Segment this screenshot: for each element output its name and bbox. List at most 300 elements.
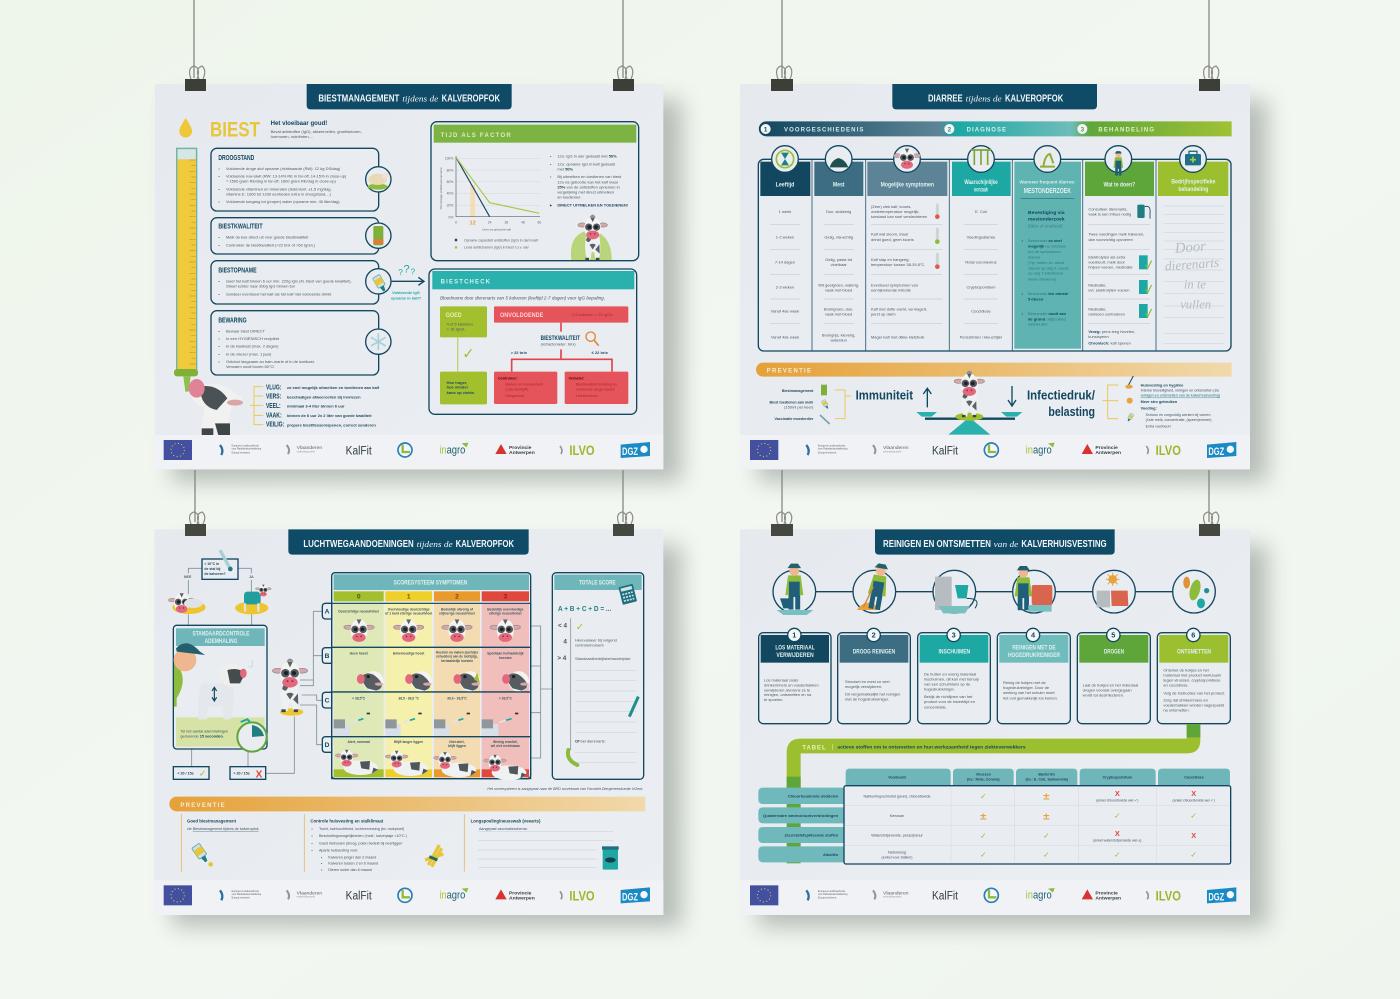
column: mogelijke symptomen: Mogelijke symptomen — [881, 181, 934, 188]
icon: calculator — [618, 584, 637, 605]
logo: round L — [984, 443, 998, 457]
box: verbeter — [565, 372, 628, 404]
column: mestonderzoek: mogelijk na ontstaan — [1028, 243, 1066, 248]
logo: ILVO — [1146, 442, 1181, 458]
panel: bewaring: • — [218, 344, 220, 349]
column: mest: vaak met bloed — [825, 287, 852, 292]
tab letters: D — [325, 742, 330, 749]
list: vijf V's: propere biestflessen/spenen, correct sonderen — [287, 422, 376, 427]
text: time facts: 12u na geboorte kan het kalf maar — [557, 179, 619, 184]
text: infectiedruk factors: Huisvesting en hygiëne — [1141, 384, 1183, 388]
card 4: hogedrukreiniger: hogedrukreiniger. Door de — [1003, 685, 1050, 690]
card 2: droog reinigen: mogelijk verwijderen. — [845, 684, 882, 689]
banner: preventie — [169, 797, 645, 811]
card 6: ontsmetten — [1157, 633, 1230, 724]
box: onvoldoende: 2-5 kalveren < 15 IgG/L — [572, 312, 614, 317]
table column headers: Cryptosporidium — [1103, 776, 1133, 780]
logo: ILVO — [1146, 887, 1181, 903]
column: mestonderzoek: Bevestiging via — [1028, 210, 1065, 216]
card 6: ontsmetten: en coccidiose. — [1163, 682, 1189, 687]
badge numbers: 1 — [792, 631, 796, 640]
column: mogelijke symptomen: drinkt goed, geen koorts — [871, 237, 914, 242]
row C: temperatuur: 38,5 - 38,9 °C — [398, 696, 420, 700]
logo: Provincie Antwerpen — [495, 889, 535, 901]
question: voldoende IgG opname: opname in kalf? — [391, 295, 422, 300]
text: time facts: met 50% — [557, 166, 574, 171]
column: mogelijke symptomen: Kalf wat sloom, maar — [871, 232, 909, 237]
effectiveness marks: (enkel chloordioxide wel ✓) — [1096, 798, 1138, 802]
text: bloedname: Bloedname door dierenarts van 5 kalveren (leeftijd 2-7 dagen) voor IgG bepaling. — [440, 295, 605, 300]
panel: droogstand: vitamine E: 1000 tot 1200 eenheden extra in droogstand,...) — [226, 191, 332, 196]
line chart: antibody uptake: 48 — [521, 220, 525, 224]
title banner — [875, 529, 1115, 555]
tab letters: C — [325, 698, 330, 705]
question box: temperature: < 10°C in — [204, 562, 219, 566]
card 6: ontsmetten: materiaal met product werkzaam — [1163, 672, 1222, 677]
box: goed: GOED — [446, 312, 462, 319]
logo: Europees Landbouwfonds — [806, 890, 848, 900]
logo: Europees Landbouwfonds: Europa investeert — [818, 897, 837, 900]
column: controle huisvesting: Controle huisvesting en stalklimaat — [310, 818, 384, 823]
question box: temperature: de stal bij — [204, 567, 220, 571]
logo: KalFit: KalFit — [346, 443, 372, 457]
column: waarschijnlijke oorzaak: oorzaak — [974, 187, 988, 194]
column: longspoeling — [464, 814, 619, 872]
column: mestonderzoek: mestonderzoek — [1028, 217, 1065, 223]
logo: Vlaanderen — [873, 890, 909, 899]
column: mestonderzoek: MESTONDERZOEK — [1024, 188, 1071, 195]
text: immuniteit factors: Biestmanagement — [782, 389, 814, 393]
logo: ILVO — [560, 887, 595, 903]
effectiveness marks: ± — [979, 811, 987, 822]
logo: Vlaanderen — [873, 445, 909, 454]
logo: inagro: inagro — [1026, 444, 1052, 456]
column: controle huisvesting: • — [321, 855, 323, 859]
box: controleer — [494, 372, 557, 404]
column: mestonderzoek: Wanneer frequent diarree: — [1019, 179, 1076, 184]
panel: bewaring: Ontdooi langzaam au bain-marie of in de koelkast. — [226, 359, 315, 364]
logo: Vlaanderen: Vlaanderen — [297, 890, 322, 896]
card 4: hogedrukreiniger: Reinig de hokjes met de — [1003, 680, 1047, 685]
line chart: antibody uptake: Percentage antilichaamopname — [439, 167, 443, 209]
arrow: down — [1008, 386, 1016, 406]
panel: droogstand: Voldoende ruw eiwit (RW: 13-14% RE in far-off, 14-15% in close-up) — [226, 173, 347, 178]
panel: droogstand: • — [218, 199, 220, 204]
line chart: antibody uptake: Opname capaciteit antistoffen (IgG) in darm kalf — [464, 238, 538, 242]
panel: bewaring: • — [218, 351, 220, 356]
column: wat te doen: Twee voedingen melk halveren, — [1088, 232, 1144, 237]
panel: tijd als factor — [431, 122, 639, 261]
arrow: up — [923, 388, 931, 407]
score columns: 1 — [407, 594, 411, 601]
panel: bewaring: In een HYGIËNISCH recipiënt — [226, 336, 280, 341]
row D: alertheid: Niet alert, — [449, 740, 465, 744]
subheading: vloeibaar goud — [271, 120, 362, 139]
logo: inagro: inagro — [1026, 890, 1052, 902]
logo: Provincie Antwerpen: Antwerpen — [509, 450, 535, 456]
column: mestonderzoek: • — [1022, 291, 1024, 296]
title banner: LUCHTWEGAANDOENINGEN — [303, 539, 414, 550]
text: immuniteit factors — [769, 385, 851, 424]
card 5: drogen: Laat de hokjes en het materiaal — [1083, 683, 1138, 688]
panel: biestopname: Sondeer eventueel het kalf als het kalf niet voldoende drinkt — [226, 291, 332, 296]
effectiveness marks: X — [1191, 789, 1196, 798]
row A: neusuitvloei: Doorzichtige neusuitvloei — [338, 609, 379, 613]
banner: preventie — [756, 363, 1232, 377]
row B: hoest: Spontaan herhaaldelijk — [487, 652, 524, 656]
column: waarschijnlijke oorzaak: Rota/ coronavirus — [965, 259, 997, 264]
column: waarschijnlijke oorzaak: Voedingsdiarree — [967, 234, 996, 239]
result: high breathing: > 20 / 15s — [233, 772, 250, 776]
column: mestonderzoek: (Tip: indien bv. uitval — [1028, 260, 1064, 265]
text: infectiedruk factors: Extra voerbeurt — [1146, 425, 1171, 429]
logo: Europees Landbouwfonds: Europa investeert — [232, 451, 250, 454]
effectiveness marks: X — [1115, 829, 1120, 838]
logo: EU flag — [164, 885, 192, 905]
card 6: ontsmetten: Ontsmet de hokjes en het — [1163, 667, 1210, 672]
logo: Vlaanderen — [287, 890, 322, 899]
box: goed — [440, 306, 487, 337]
text: infectiedruk factors: (1ste melk, concentratie, (speen)emmer) — [1146, 418, 1212, 422]
column: controle huisvesting: Tocht, luchtvochtheid, luchtverversing (bv. rookproef) — [319, 827, 404, 831]
text: time facts: vergelijking met direct uitmelken — [557, 189, 614, 194]
list: vijf V's: VEEL: — [266, 403, 281, 410]
panel: droogstand: • — [218, 173, 220, 178]
effectiveness marks: X — [1191, 831, 1196, 840]
card 4: hogedrukreiniger — [997, 633, 1070, 724]
text: time facts: DIRECT UITMELKEN EN TOEDIENEN! — [557, 202, 628, 207]
line chart: antibody uptake: 24 — [488, 220, 492, 224]
text: infectiedruk factors — [1102, 376, 1220, 429]
box: controleer: Controleer: — [498, 376, 518, 380]
text: immuniteit factors: (150ml per keer) — [784, 405, 814, 410]
panel: droogstand: Voldoende droge stof opname (richtwaarde (RW): 12 kg DS/dag) — [226, 166, 341, 171]
table body: Kenosan — [890, 814, 904, 818]
text: infectiedruk factors: reinigen en ontsmetten van de kalverhuisvesting) — [1141, 394, 1220, 398]
illustration: breathing calf — [198, 660, 253, 719]
logo: Vlaanderen — [287, 445, 322, 454]
box: goed: 4 of 5 kalveren — [447, 322, 473, 327]
box: verbeter: Verbeter: — [569, 376, 585, 380]
tab letters: A — [325, 609, 330, 616]
table body: Natriumhypochloriet (javel), chloordioxide — [863, 794, 931, 798]
row labels: Quaternaire ammoniumverbindingen — [763, 813, 839, 818]
card 1: los materiaal: te spoelen. — [764, 697, 783, 702]
column: mogelijke symptomen: (Zeer) ziek kalf, koorts, — [871, 204, 912, 209]
logo: Europees Landbouwfonds: Europa investeert — [232, 897, 250, 900]
logo: Europees Landbouwfonds: Europees Landbouwfonds — [232, 890, 260, 893]
line chart: antibody uptake: 12 — [470, 221, 476, 227]
column: wat te doen: Wat te doen? — [1103, 181, 1135, 188]
text: time facts — [549, 154, 628, 207]
score columns: 2 — [455, 594, 459, 601]
card 1: los materiaal: Los materiaal zoals — [764, 678, 798, 683]
card 3: inschuimen: inschuimen, dit kan met behulp — [924, 676, 980, 681]
row labels — [758, 787, 844, 863]
result: high breathing: X — [256, 769, 263, 780]
panel: totale score — [552, 573, 644, 779]
card 4: hogedrukreiniger: REINIGEN MET DE — [1012, 644, 1056, 651]
logo: Vlaanderen: Vlaanderen — [883, 890, 909, 896]
effectiveness marks: ✓ — [1190, 812, 1197, 821]
logo: round L — [984, 888, 998, 902]
table body: (enkel voor stallen) — [882, 856, 912, 860]
column: mogelijke symptomen: ondertemperatuur mogelijk; — [871, 209, 920, 214]
box: hoe hoger: Hoe hoger, — [447, 380, 467, 385]
column: mest: Dun, slokkerig — [826, 209, 851, 214]
step 4 illustration — [1013, 566, 1055, 613]
card 2: droog reinigen: met de hogedrukreiniger. — [845, 697, 889, 702]
effectiveness marks: ✓ — [1190, 851, 1197, 860]
column: leeftijd: Leeftijd — [776, 181, 794, 188]
logo: DGZ: DGZ — [622, 446, 638, 458]
row D: alertheid: Alert, normaal — [347, 740, 370, 744]
panel: bewaring: • — [218, 359, 220, 364]
poster 3: luchtwegaandoeningen — [154, 529, 663, 915]
footer: partner logos — [740, 880, 1250, 915]
panel: biestkwaliteit — [211, 218, 379, 254]
logo: Vlaanderen: verbeelding werkt — [883, 450, 902, 453]
column: controle huisvesting: Kalveren tussen 2 en 6 maand — [328, 862, 378, 866]
text: time facts: • — [550, 174, 552, 179]
logo: ILVO: ILVO — [569, 887, 595, 903]
box: verbeter: voldoende droge koeien — [576, 388, 615, 392]
column: waarschijnlijke oorzaak: Coccidiose — [971, 309, 992, 314]
step bar: voorgeschiedenis diagnose behandeling: VOORGESCHIEDENIS — [784, 128, 863, 134]
line chart: antibody uptake — [439, 156, 541, 250]
row A: neusuitvloei — [332, 603, 531, 647]
row A: neusuitvloei: Overvloedige doorzichtige — [388, 607, 430, 611]
panel: bewaring: Verwarm nooit boven 60°C! — [226, 364, 275, 369]
panel: droogstand: • — [218, 166, 220, 171]
heading: immuniteit: Immuniteit — [856, 388, 914, 402]
column: wat te doen: Chronisch: kalf spenen — [1088, 340, 1131, 345]
panel: standaardcontrole ademhaling: gedurende 15 seconden. — [180, 735, 224, 739]
logo: inagro: inagro — [439, 890, 465, 902]
label: NEE: NEE — [184, 575, 192, 579]
column: mogelijke symptomen: eenrijkomende infectie — [871, 287, 912, 292]
step bar: voorgeschiedenis diagnose behandeling: 3 — [1081, 126, 1085, 133]
row D: alertheid: wil niet rechtstaan — [490, 744, 520, 748]
card 2: droog reinigen: DROOG REINIGEN — [853, 649, 895, 656]
card 5: drogen — [1077, 633, 1150, 724]
title banner: REINIGEN EN ONTSMETTEN — [883, 539, 991, 550]
step bar: voorgeschiedenis diagnose behandeling: 1 — [764, 126, 768, 133]
panel: biestkwaliteit: BIESTKWALITEIT — [218, 224, 263, 231]
column: wat te doen: dan voorzichtig opvoeren — [1088, 237, 1133, 242]
column: mestonderzoek: • — [1022, 238, 1024, 243]
heading: infectiedruk belasting — [1027, 388, 1095, 419]
line chart: antibody uptake: Uren na geboorte kalf — [482, 227, 511, 231]
panel: totale score: Of bel dierenarts: — [575, 738, 606, 743]
step 6 illustration — [1173, 570, 1215, 613]
card 4: hogedrukreiniger: HOGEDRUKREINIGER — [1008, 652, 1060, 659]
illustration: calf drinking — [189, 379, 243, 435]
box: verbeter: Biestkwaliteit bolading en — [576, 383, 617, 387]
column: waarschijnlijke oorzaak: E. Coli — [975, 209, 987, 214]
panel: biestopname: • — [218, 279, 220, 284]
column: mestonderzoek: vanhet dier — [1028, 322, 1048, 327]
logo: Vlaanderen: verbeelding werkt — [883, 896, 902, 899]
card 4: hogedrukreiniger: het vuil gemakkelijk los komen. — [1003, 695, 1058, 700]
header: tijd als factor — [434, 125, 636, 143]
logo: Provincie Antwerpen — [1082, 444, 1121, 456]
panel: biestkwaliteit: • — [218, 235, 220, 240]
card 6: ontsmetten: voederbakken worden nagespoeld — [1163, 703, 1224, 708]
card 3: inschuimen: Bekijk de richtlijnen van het — [924, 694, 973, 699]
column: mest: Mest — [833, 181, 845, 188]
card 6: ontsmetten: Volg de instructies van het product. — [1163, 690, 1225, 695]
step 2 illustration — [853, 562, 896, 613]
column: wat te doen: Consulteer dierenarts, — [1088, 207, 1128, 212]
row D: alertheid: Blijft langer liggen — [394, 740, 423, 744]
text: time facts: Bij uitmelken en toedienen van biest — [557, 174, 622, 179]
logo: Europees Landbouwfonds: Europees Landbouwfonds — [232, 445, 260, 448]
title banner: KALVERHUISVESTING — [1021, 539, 1107, 550]
panel: droogstand: Voldoende toegang tot (proper) water (opname min. 40 liter/dag) — [226, 199, 340, 204]
title banner — [892, 84, 1097, 109]
icon: timer — [237, 719, 267, 752]
logo: DGZ: DGZ — [1208, 891, 1224, 903]
card 5: drogen: wordt tot desinfecteren. — [1083, 693, 1124, 698]
column: leeftijd — [760, 162, 810, 339]
panel: biestopname — [211, 261, 379, 304]
column: leeftijd: Vanaf 4de week — [771, 309, 799, 314]
badge numbers: 5 — [1111, 631, 1115, 640]
column: bedrijfsspecifieke behandeling: Door — [1173, 239, 1207, 257]
icon: manure pile — [830, 158, 848, 167]
logo: Vlaanderen: Vlaanderen — [883, 445, 909, 451]
list: vijf V's: binnen de 6 uur 2x 2 liter van goede kwaliteit — [287, 413, 372, 418]
line chart: antibody uptake: 36 — [504, 220, 508, 224]
table column headers: Voorbeeld — [888, 776, 906, 780]
step 3 illustration — [933, 570, 977, 613]
title banner: tijdens de — [966, 94, 1002, 104]
column: bedrijfsspecifieke behandeling: dierenarts — [1164, 255, 1220, 274]
column: bedrijfsspecifieke behandeling: in te — [1184, 277, 1206, 291]
result: high breathing — [230, 767, 266, 780]
header: biestcheck — [432, 271, 634, 289]
card 1: los materiaal: VERWIJDEREN — [776, 652, 814, 659]
footer: partner logos — [154, 880, 663, 915]
box: hoe hoger — [440, 372, 487, 404]
panel: biestopname: • — [218, 291, 220, 296]
subheading: vloeibaar goud: Bevat antistoffen (IgG), afweercellen, groeifactoren, — [271, 129, 362, 134]
effectiveness marks: X — [1115, 789, 1120, 798]
badge numbers: 6 — [1191, 631, 1195, 640]
effectiveness marks: ✓ — [980, 851, 987, 860]
logo: Vlaanderen: verbeelding werkt — [297, 896, 315, 899]
row C: temperatuur — [332, 692, 531, 737]
card 1: los materiaal: verwijderen alvorens ze te — [764, 687, 811, 692]
row labels: Alkaliën — [823, 852, 839, 857]
card 6: ontsmetten: tegen virussen, cryptosporidiose — [1163, 677, 1221, 682]
logo: round L — [398, 443, 412, 457]
panel: totale score: Herevalueer bij volgend — [575, 637, 617, 642]
column: mest — [814, 162, 863, 342]
column: mogelijke symptomen: Kalf met dofle vacht, vermagert, — [871, 306, 927, 311]
column: wat te doen: rantsoen controleren — [1088, 311, 1125, 316]
card 2: droog reinigen: Dit vergemakkelijkt het reinigen — [845, 692, 900, 697]
logo: DGZ: DGZ — [1208, 446, 1224, 458]
column: mest: vloeibaar — [831, 262, 847, 267]
column: mestonderzoek: 5 dieren — [1028, 296, 1044, 301]
column: leeftijd: Vanaf 4de week — [771, 334, 799, 339]
logo: Europees Landbouwfonds: voor Plattelandsontwikkeling — [232, 893, 262, 896]
row A: neusuitvloei: Bedeidijk uitvorig of — [441, 607, 474, 611]
logo: Europees Landbouwfonds — [220, 890, 262, 900]
row B: hoest: hoesten — [499, 656, 512, 660]
logo: Provincie Antwerpen — [1082, 889, 1121, 901]
icon: medical case — [1185, 151, 1201, 165]
column: mest: waterdun — [830, 337, 847, 342]
column: leeftijd: 1 week — [779, 209, 791, 214]
connector and check: ✓ — [462, 345, 474, 362]
panel: biestopname: Streef echter naar 300g IgG binnen 6u! — [226, 283, 295, 288]
row B: hoest — [332, 647, 531, 692]
row B: hoest: schudden) aan de luchtpijp, — [436, 655, 478, 659]
panel: totale score: 4 — [563, 639, 567, 646]
title banner — [307, 84, 512, 109]
column: mogelijke symptomen: Mager kalf met dikke kletsbuik — [871, 334, 924, 339]
header: scoresysteem: SCORESYSTEEM SYMPTOMEN — [393, 580, 467, 587]
panel: standaardcontrole ademhaling: Tel het aantal ademhalingen — [180, 730, 228, 734]
badge numbers: 4 — [1031, 631, 1036, 640]
tab letters: B — [325, 653, 330, 660]
column: mogelijke symptomen — [867, 162, 947, 339]
title banner — [288, 529, 529, 555]
column: mestonderzoek: Bemonster zo snel — [1028, 238, 1062, 243]
effectiveness marks: (enkel chloordioxide wel ✓) — [1173, 798, 1215, 802]
logo: ILVO: ILVO — [569, 442, 595, 458]
column: controle huisvesting: Dieren ouder dan 6 maand — [328, 868, 372, 872]
table: voorgeschiedenis tot behandeling — [758, 146, 1231, 351]
logo: Europees Landbouwfonds: voor Plattelandsontwikkeling — [232, 448, 262, 451]
column: controle huisvesting: • — [311, 848, 313, 852]
row B: hoest: herhaaldelijk hoesten — [441, 659, 473, 663]
illustration: calf center — [273, 658, 307, 716]
logo: Provincie Antwerpen: Antwerpen — [1095, 895, 1121, 901]
step bar: voorgeschiedenis diagnose behandeling: DIAGNOSE — [967, 128, 1006, 134]
cards row — [759, 628, 1230, 724]
logo: ILVO — [560, 442, 595, 458]
icon: hourglass — [776, 150, 794, 168]
banner: preventie: PREVENTIE — [180, 803, 225, 809]
card 1: los materiaal: drinkemmers en voederbakken — [764, 683, 819, 688]
column: mest: Wit geelgroen, waterig, — [818, 282, 859, 287]
column: wat te doen: Medicatie, — [1088, 306, 1107, 311]
panel: totale score: > 4 — [557, 655, 567, 662]
card 1: los materiaal: reinigen, ontsmetten en na — [764, 692, 812, 697]
column: mogelijke symptomen: Eventueel symptomen van — [871, 282, 918, 287]
logo: EU flag — [164, 440, 192, 460]
panel: bewaring: • — [218, 336, 220, 341]
column: longspoeling: Longspoeling/neusswab (veearts) — [471, 818, 541, 823]
column: mestonderzoek: diarree — [1028, 254, 1041, 259]
tab letters — [325, 609, 330, 749]
decision: biestkwaliteit brix: > 22 brix — [511, 350, 528, 355]
row C: temperatuur: 39,0 - 39,5°C — [447, 696, 467, 700]
card 2: droog reinigen: Strooisel en mest zo veel — [845, 679, 890, 684]
table: scoresysteem symptomen — [332, 573, 531, 780]
column: mest: Bruingroen, dun, — [824, 306, 853, 311]
card 1: los materiaal: LOS MATERIAAL — [775, 644, 815, 651]
table body: Natronloog — [888, 851, 906, 855]
column: bedrijfsspecifieke behandeling: vullen — [1180, 297, 1211, 311]
score columns — [334, 591, 529, 777]
title banner: tijdens de — [402, 94, 438, 104]
table column headers: Virussen — [976, 773, 991, 777]
